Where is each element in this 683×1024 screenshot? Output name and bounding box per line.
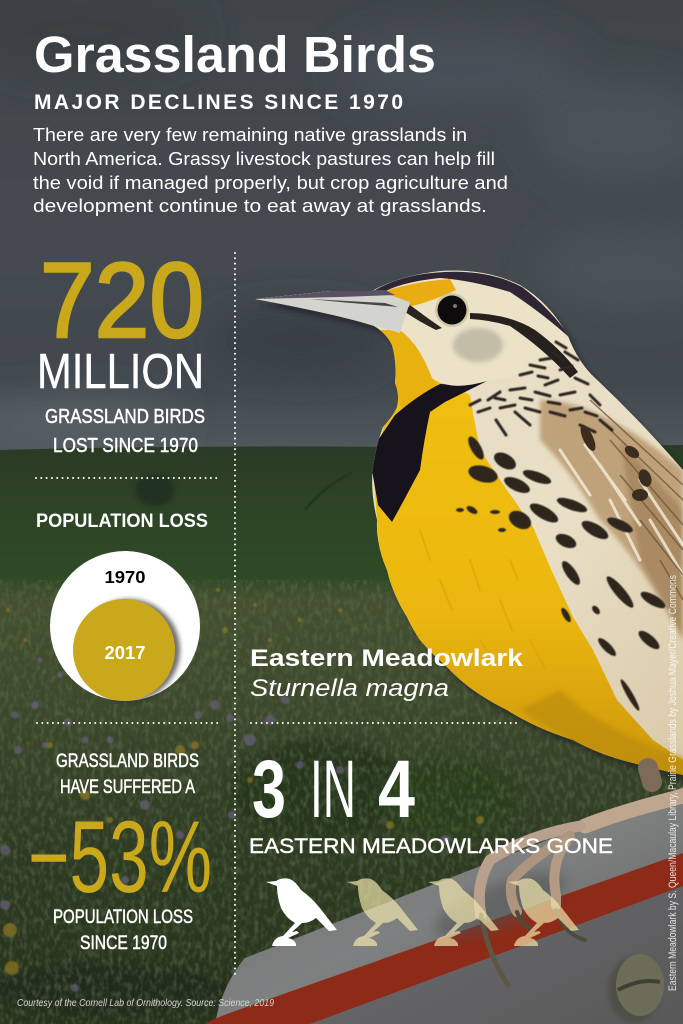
stat: 720 million: MILLION [37, 345, 204, 399]
title: Grassland Birds [34, 26, 436, 83]
back streaks [578, 423, 654, 501]
intro paragraph: North America. Grassy livestock pastures can help fill [33, 148, 495, 169]
background: wildflower meadow [0, 580, 683, 1024]
crown stripes [372, 272, 572, 340]
eastern meadowlark photo illustration [250, 260, 683, 985]
icon: lost bird 2 [428, 878, 499, 946]
background: stormy sky [0, 0, 683, 450]
icons: four bird silhouettes [266, 878, 579, 946]
icon: lost bird 1 [347, 878, 418, 946]
intro paragraph: development continue to eat away at grasslands. [33, 195, 487, 216]
chart: population circles [50, 551, 200, 701]
species name: Sturnella magna [250, 675, 449, 702]
base plumage [250, 260, 683, 780]
back feathers [540, 400, 683, 640]
cheek [453, 328, 503, 362]
horizontal dotted divider [36, 477, 217, 479]
subtitle: MAJOR DECLINES SINCE 1970 [34, 91, 403, 114]
chart: population circles: 1970 [104, 567, 146, 587]
eye stripe [470, 313, 578, 378]
photo credit: Eastern Meadowlark by S. Queen/Macaulay Library, Prairie Grasslands by Joshua Mayer/Creative Commons [667, 575, 679, 991]
fence post with red stripe [205, 787, 683, 1024]
stat: 3 in 4: IN [310, 744, 356, 835]
breast and flank spots [456, 434, 668, 712]
stat: 53 percent loss [28, 751, 212, 954]
eye [435, 293, 469, 327]
black bib [372, 381, 487, 522]
stat: 720 million: LOST SINCE 1970 [53, 435, 198, 457]
stat: 53 percent loss: SINCE 1970 [80, 933, 167, 954]
yellow breast [373, 330, 683, 790]
stat: 53 percent loss: GRASSLAND BIRDS [56, 751, 199, 772]
intro paragraph [33, 124, 508, 216]
stat: 720 million: GRASSLAND BIRDS [45, 406, 205, 428]
stat: 3 in 4 [249, 744, 613, 858]
nape streaks [470, 342, 612, 435]
screw [608, 954, 664, 1023]
stat: 3 in 4: EASTERN MEADOWLARKS GONE [249, 835, 613, 858]
icon: lost bird 3 [508, 878, 579, 946]
heading: population loss: POPULATION LOSS [36, 510, 208, 532]
head cream [400, 284, 545, 386]
intro paragraph: There are very few remaining native grasslands in [33, 124, 467, 145]
chart: population circles: 2017 [104, 643, 146, 663]
stat: 3 in 4: 3 [252, 744, 286, 835]
background: green hills [0, 445, 683, 600]
species name [250, 645, 524, 702]
leg and toes [479, 768, 683, 985]
source note: Courtesy of the Cornell Lab of Ornithology. Source: Science, 2019 [17, 997, 274, 1009]
stat: 720 million [37, 240, 205, 457]
stat: 53 percent loss: POPULATION LOSS [53, 907, 193, 928]
species name: Eastern Meadowlark [250, 645, 524, 672]
stat: 3 in 4: 4 [378, 744, 415, 835]
stat: 53 percent loss: HAVE SUFFERED A [60, 777, 195, 798]
icon: remaining bird [266, 878, 337, 946]
flowers [0, 588, 484, 992]
horizontal dotted divider right [251, 722, 518, 724]
vertical dotted divider [234, 253, 236, 975]
horizontal dotted divider left [37, 722, 220, 724]
intro paragraph: the void if managed properly, but crop agriculture and [33, 172, 508, 193]
beak [255, 291, 410, 333]
stat: 53 percent loss: −53% [28, 800, 212, 914]
stat: 720 million: 720 [40, 240, 204, 360]
